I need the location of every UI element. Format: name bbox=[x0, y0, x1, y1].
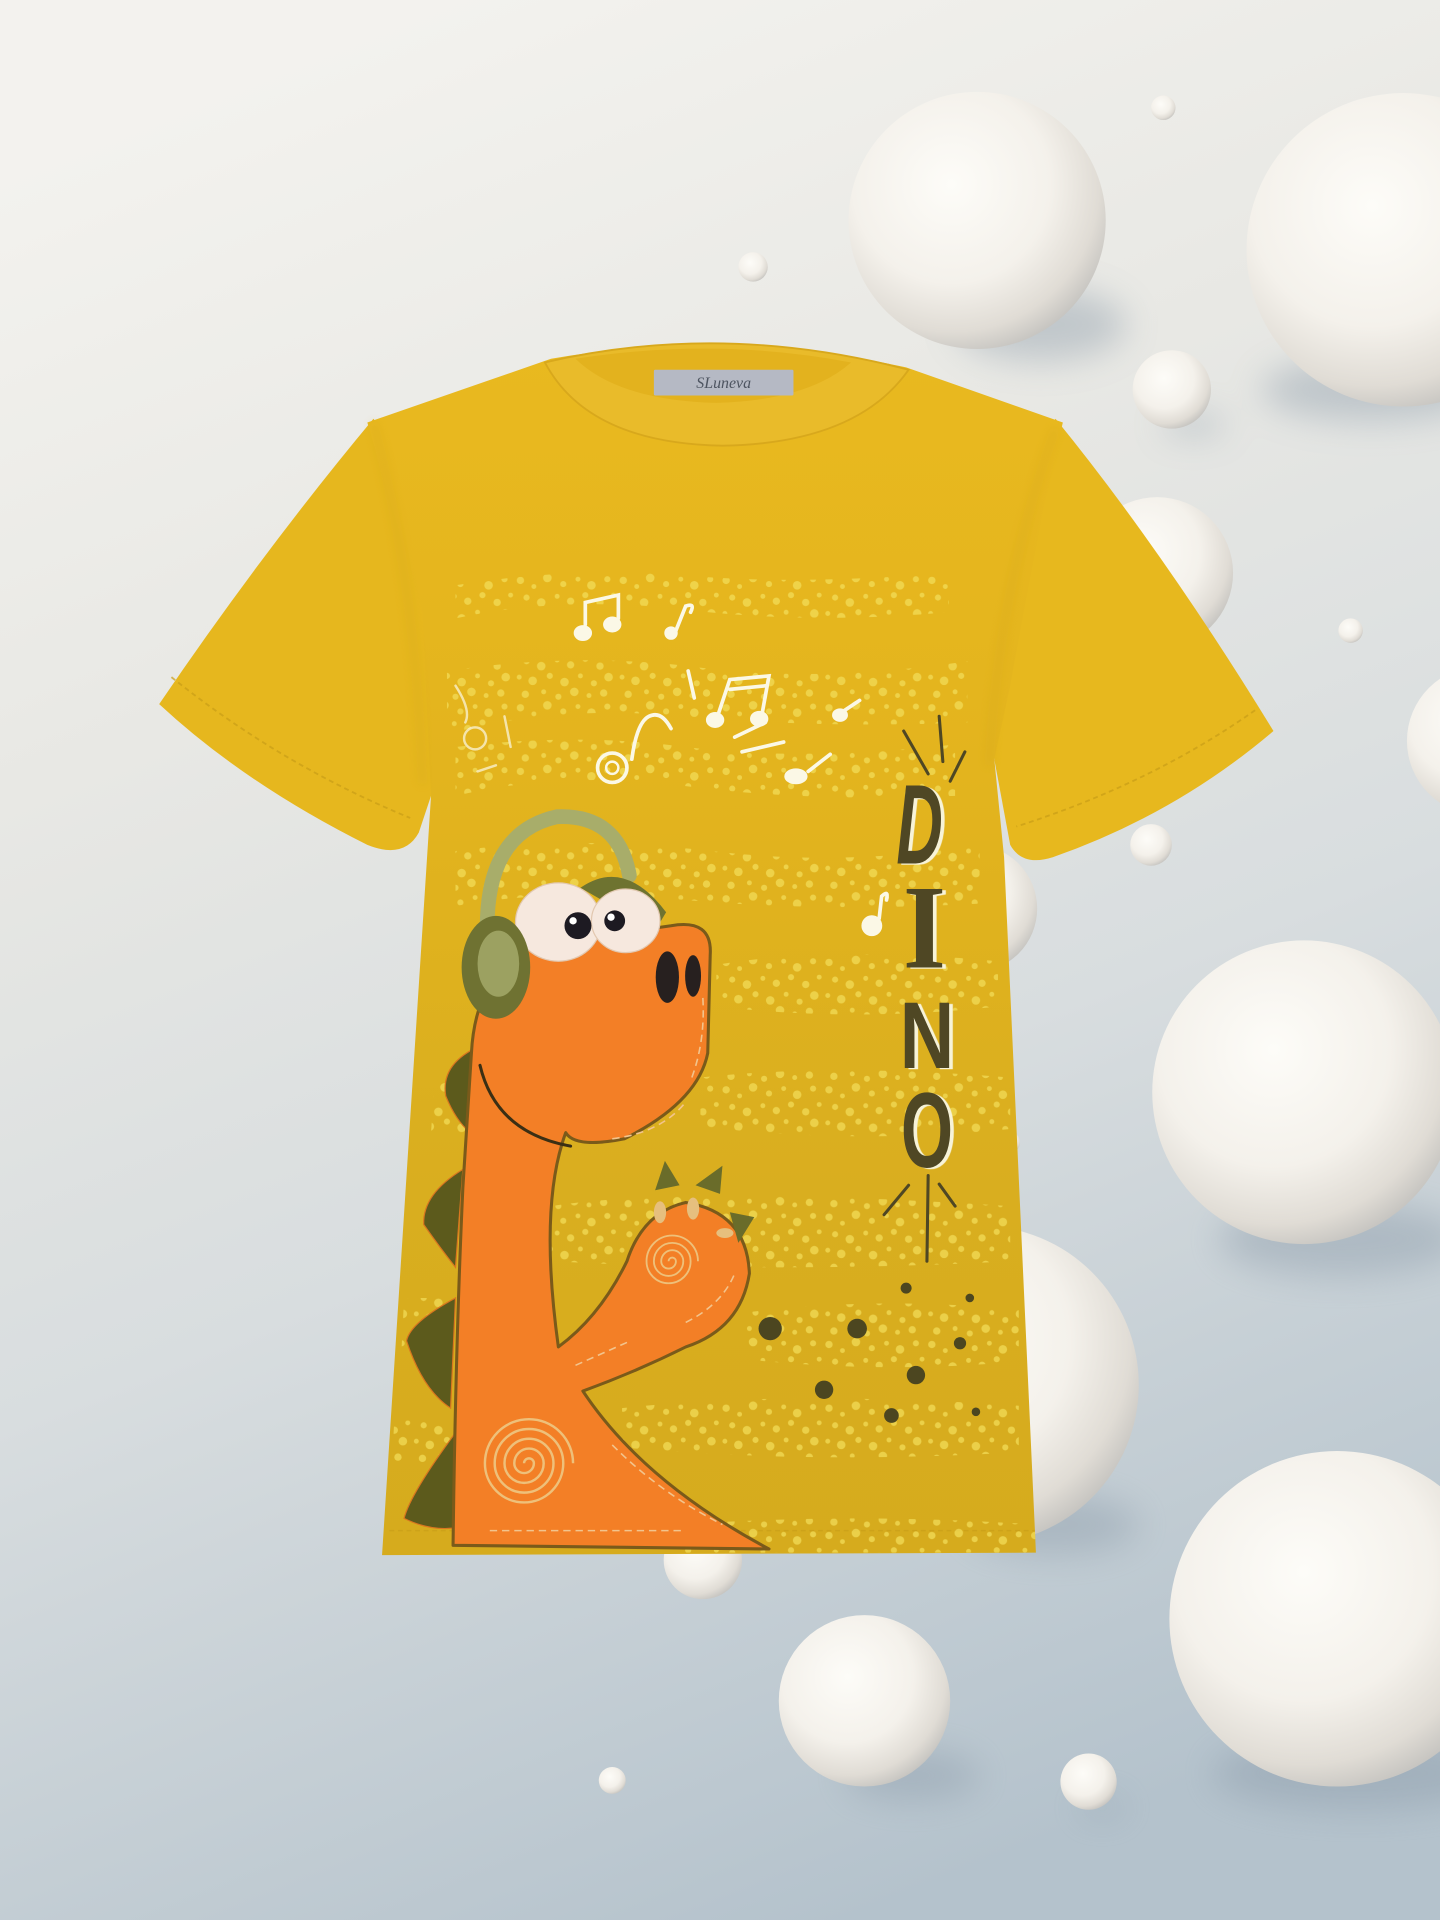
collar bbox=[545, 343, 909, 446]
music notes bbox=[456, 595, 887, 936]
DINO vertical print text: I bbox=[903, 860, 946, 993]
dino back spikes bbox=[404, 1048, 475, 1529]
DINO vertical print text: N bbox=[900, 984, 954, 1089]
eyes bbox=[516, 883, 601, 961]
t-shirt bbox=[159, 343, 1273, 1555]
paw pads and spiral bbox=[654, 1198, 733, 1238]
shirt body bbox=[367, 345, 1063, 1555]
neck label: SLuneva bbox=[696, 375, 751, 392]
sphere shadows bbox=[845, 288, 1440, 1816]
DINO vertical print text: D bbox=[896, 762, 943, 888]
dino body bbox=[453, 924, 769, 1549]
sleeve shading and hem stitches bbox=[171, 422, 1255, 1531]
decorative spheres bbox=[599, 92, 1440, 1810]
dark scattered dots bbox=[759, 1283, 980, 1423]
left sleeve bbox=[159, 419, 465, 850]
right sleeve bbox=[980, 419, 1273, 860]
DINO vertical print text: O bbox=[901, 1071, 953, 1190]
dino smile bbox=[480, 1065, 571, 1146]
nostrils bbox=[656, 951, 679, 1003]
DINO vertical print text bbox=[896, 762, 954, 1190]
headphone cup bbox=[462, 916, 530, 1019]
body stitches bbox=[490, 998, 735, 1531]
eyelid bbox=[580, 877, 666, 931]
neck opening bbox=[576, 349, 851, 403]
headphone band bbox=[487, 817, 629, 937]
yellow dotted print bands bbox=[392, 572, 1036, 1553]
radiating lines around DINO bbox=[884, 716, 965, 1261]
paw claws bbox=[655, 1161, 754, 1243]
neck label bbox=[654, 370, 793, 396]
tummy spiral bbox=[485, 1419, 573, 1502]
dino applique bbox=[404, 817, 769, 1549]
